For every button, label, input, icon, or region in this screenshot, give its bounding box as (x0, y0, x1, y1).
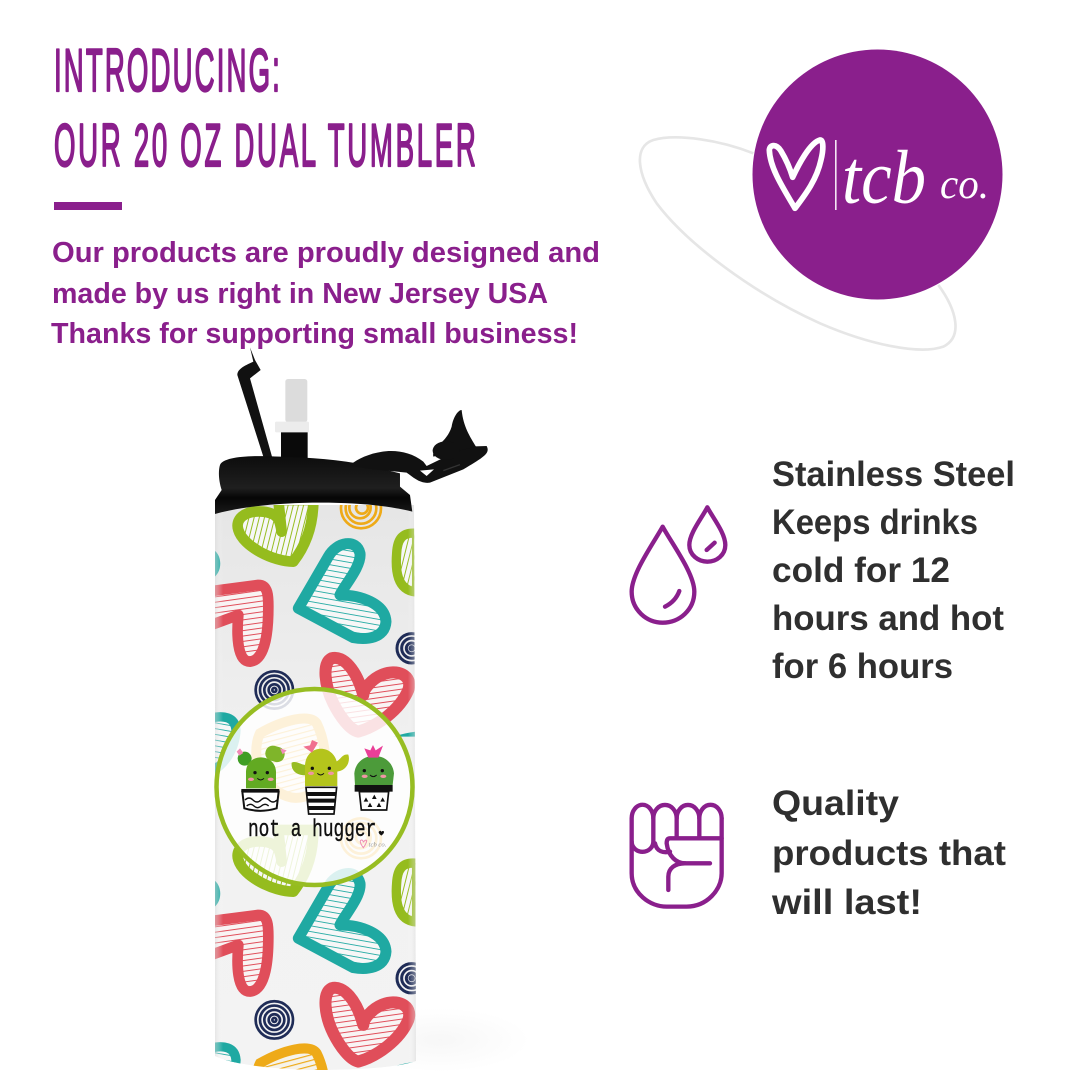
icon: logo heart (769, 140, 823, 208)
intro text block: made by us right in New Jersey USA (52, 278, 548, 310)
cactus 2 (292, 740, 349, 814)
logo wordmark: co. (940, 162, 989, 208)
badge mini logo: tcb co. (369, 842, 387, 849)
product badge: not a hugger (216, 689, 412, 885)
tumbler lid and straps (215, 347, 488, 514)
feature text: stainless steel: Stainless Steel (772, 455, 1015, 494)
decorative ellipse behind logo (640, 137, 956, 350)
feature text: stainless steel (772, 455, 1015, 686)
title line 1: INTRODUCING: (54, 37, 280, 104)
title (54, 37, 476, 179)
feature text: stainless steel: for 6 hours (772, 647, 953, 686)
feature text: quality: will last! (771, 883, 922, 922)
intro text block (51, 237, 600, 350)
badge heart dot (379, 831, 384, 836)
tumbler straw (275, 379, 309, 458)
intro text block: Our products are proudly designed and (52, 237, 600, 269)
logo badge (752, 50, 1002, 300)
feature text: quality (771, 784, 1006, 922)
tumbler (207, 347, 488, 1080)
cactus 1 (237, 744, 287, 811)
feature text: quality: Quality (772, 784, 900, 823)
cactus 3 (354, 745, 394, 810)
icon: water drops (632, 507, 725, 623)
feature text: stainless steel: cold for 12 (772, 551, 950, 590)
tumbler floor shadow (350, 1008, 530, 1072)
badge text: not a hugger (248, 817, 376, 844)
tumbler printed body (215, 505, 416, 1070)
feature text: quality: products that (772, 834, 1006, 873)
logo wordmark: tcb (842, 136, 926, 220)
badge mini logo (360, 840, 387, 849)
intro text block: Thanks for supporting small business! (51, 318, 578, 350)
icon: raised fist (632, 805, 722, 907)
title underline (54, 202, 122, 210)
feature text: stainless steel: hours and hot (772, 599, 1004, 638)
logo wordmark (842, 136, 989, 220)
logo divider (835, 140, 837, 210)
feature text: stainless steel: Keeps drinks (772, 503, 978, 542)
title line 2: OUR 20 OZ DUAL TUMBLER (54, 112, 476, 179)
